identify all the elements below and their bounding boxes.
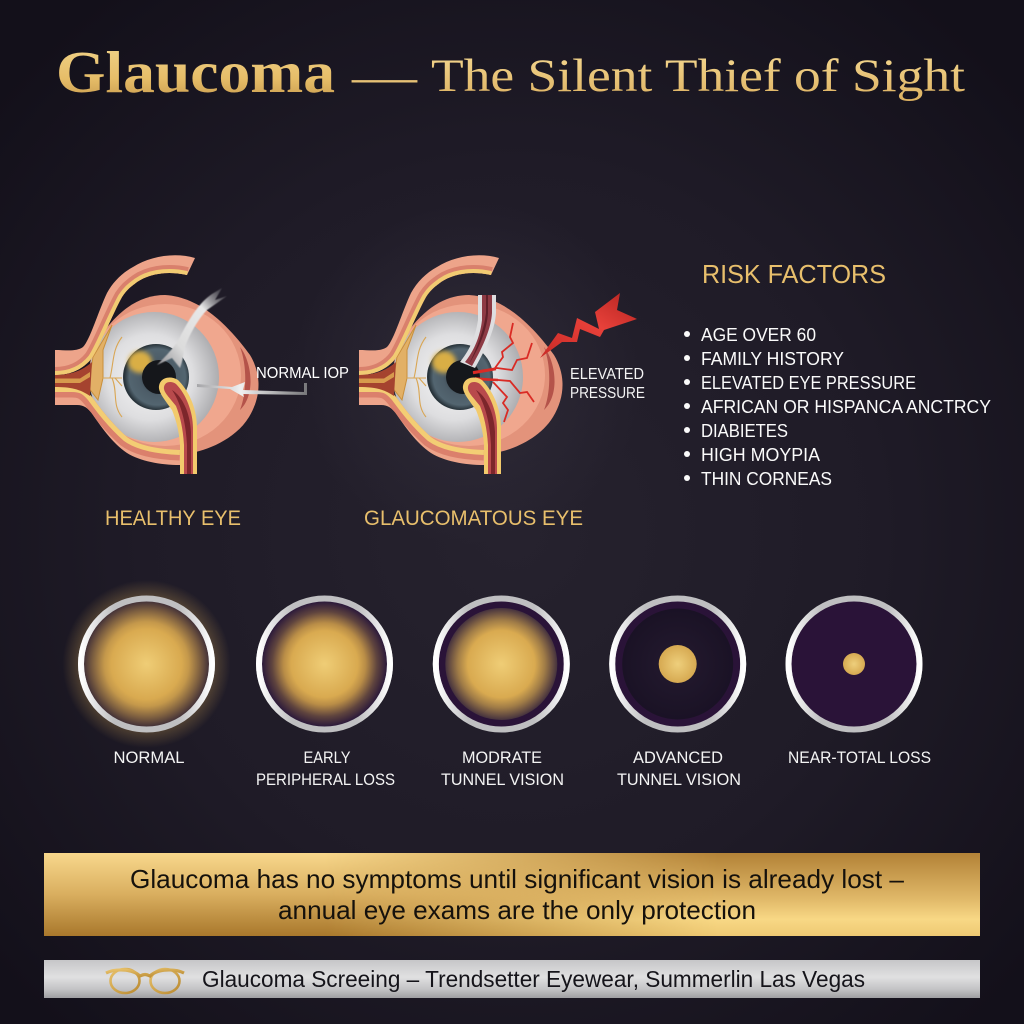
panel: vision stage near-total loss: NEAR-TOTAL LOSS — [788, 749, 931, 767]
list: risk factors: AFRICAN OR HISPANCA ANCTRCY — [701, 396, 991, 417]
label: elevated pressure — [570, 366, 645, 402]
list: risk factors: THIN CORNEAS — [701, 468, 832, 489]
title: The Silent Thief of Sight — [431, 50, 965, 102]
panel: vision stage near-total loss — [788, 598, 931, 767]
panel: vision stage advanced tunnel vision — [612, 598, 743, 789]
panel: vision stage advanced tunnel vision: TUNNEL VISION — [617, 771, 741, 789]
list: risk factors: DIABIETES — [701, 420, 788, 441]
panel: vision stage early peripheral loss: PERIPHERAL LOSS — [256, 771, 395, 789]
heading: healthy eye: HEALTHY EYE — [105, 507, 241, 530]
panel: vision stage moderate tunnel vision: MODRATE — [462, 749, 542, 767]
panel: glaucomatous eye — [354, 245, 645, 474]
label: elevated pressure: ELEVATED — [570, 366, 644, 383]
list: risk factors: HIGH MOYPIA — [701, 444, 821, 465]
title: — — [351, 51, 418, 103]
panel: vision stage moderate tunnel vision: TUNNEL VISION — [441, 771, 564, 789]
callout: gold banner — [44, 853, 980, 936]
arrow: normal IOP pointer — [197, 382, 307, 397]
title — [56, 39, 965, 105]
panel: vision stage normal: NORMAL — [114, 749, 184, 767]
list: risk factors: ELEVATED EYE PRESSURE — [701, 372, 916, 393]
icon: red pressure cracks — [473, 323, 534, 422]
list: risk factors — [684, 324, 991, 489]
panel: vision stage early peripheral loss — [256, 598, 395, 789]
panel: vision stage advanced tunnel vision: ADVANCED — [633, 749, 723, 767]
panel: vision stage moderate tunnel vision — [436, 598, 567, 789]
title: Glaucoma — [56, 39, 335, 105]
label: normal IOP: NORMAL IOP — [256, 365, 349, 382]
icon: aqueous outflow silver channel — [157, 288, 227, 368]
panel: risk factors — [684, 259, 991, 489]
footer: silver bar: Glaucoma Screeing – Trendsetter Eyewear, Summerlin Las Vegas — [202, 966, 865, 992]
label: elevated pressure: PRESSURE — [570, 385, 645, 402]
callout: gold banner: Glaucoma has no symptoms until significant vision is already lost – — [130, 864, 905, 894]
icon: red lightning bolt — [540, 293, 637, 358]
list: risk factors: FAMILY HISTORY — [701, 348, 844, 369]
panel: vision stage early peripheral loss: EARLY — [304, 749, 350, 767]
footer: silver bar — [44, 960, 980, 998]
heading: risk factors: RISK FACTORS — [702, 259, 886, 289]
icon: gold eyeglasses — [106, 969, 184, 993]
callout: gold banner: annual eye exams are the only protection — [278, 895, 756, 925]
heading: glaucomatous eye: GLAUCOMATOUS EYE — [364, 507, 583, 530]
panel: vision stage normal — [62, 580, 230, 767]
list: risk factors: AGE OVER 60 — [701, 324, 816, 345]
panel: healthy eye — [50, 245, 349, 474]
icon: blocked drainage channel — [460, 295, 496, 368]
